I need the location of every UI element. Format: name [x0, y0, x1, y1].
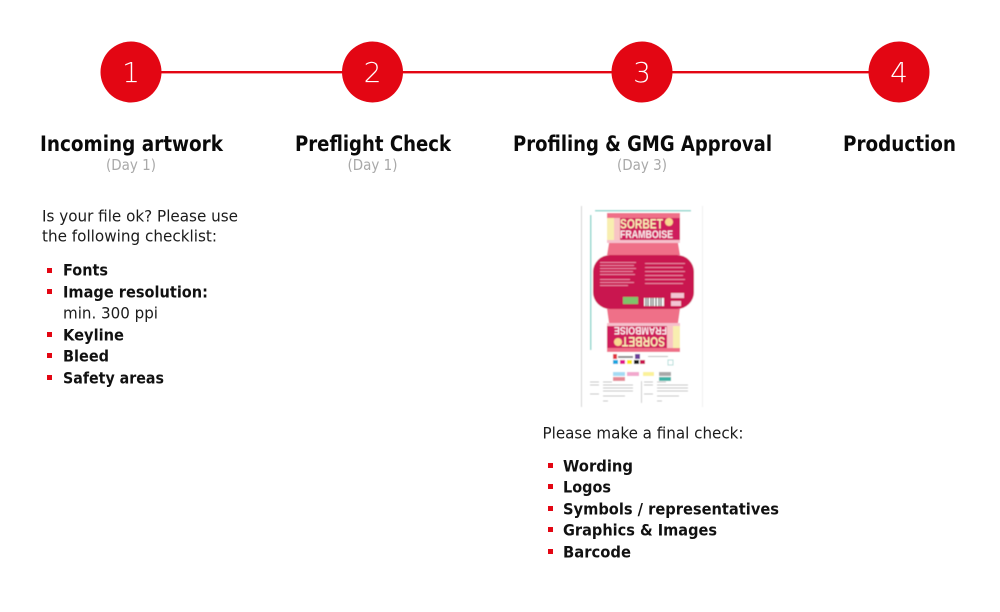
timeline connector line: [131, 71, 899, 73]
final checklist: Wording: [563, 456, 633, 476]
bottom lid panel, upside down: SORBET: [622, 334, 665, 350]
step 2 marker: 2: [364, 56, 381, 89]
step 1 marker: 1: [122, 56, 140, 89]
final checklist: Logos: [563, 478, 611, 496]
bottom lid panel, upside down: [607, 323, 680, 352]
date: day 1: (Day 1): [348, 156, 398, 174]
final check intro text: Please make a final check:: [542, 424, 744, 442]
checklist intro text: [42, 206, 238, 246]
artwork checklist: min. 300 ppi: [63, 304, 158, 322]
final checklist: Barcode: [563, 542, 631, 562]
central oval panel with back label: [593, 255, 694, 309]
top lid panel: SORBET: [620, 216, 663, 232]
artwork checklist: Bleed: [63, 346, 109, 366]
heading: production: Production: [843, 132, 956, 156]
date: day 3: (Day 3): [617, 156, 667, 174]
heading: preflight check: Preflight Check: [295, 132, 452, 156]
checklist intro text: Is your file ok? Please use: [42, 206, 238, 226]
upper light pink panel: [607, 243, 680, 255]
step 3 marker: 3: [633, 56, 651, 89]
step 2 marker: [342, 42, 403, 102]
checklist intro text: the following checklist:: [42, 226, 217, 246]
final checklist: [548, 456, 779, 562]
heading: profiling and GMG approval: Profiling & GMG Approval: [513, 132, 772, 156]
artwork checklist: Image resolution:: [63, 282, 208, 302]
final checklist: Graphics & Images: [563, 520, 717, 540]
step 4 marker: 4: [890, 56, 908, 89]
date: day 1: (Day 1): [106, 156, 156, 174]
final checklist: Symbols / representatives: [563, 500, 779, 518]
artwork checklist: Keyline: [63, 326, 124, 344]
artwork checklist: Fonts: [63, 260, 108, 280]
artwork checklist: [47, 260, 208, 388]
top lid panel: [607, 213, 680, 243]
bottom lid panel, upside down: FRAMBOISE: [614, 324, 667, 336]
step 3 marker: [612, 42, 672, 102]
packaging proof image: [581, 206, 703, 407]
colour bars and approval details: [590, 354, 688, 403]
step 1 marker: [100, 42, 162, 102]
heading: incoming artwork: Incoming artwork: [40, 132, 224, 156]
artwork checklist: Safety areas: [63, 368, 164, 388]
lower light pink panel: [607, 309, 680, 323]
step 4 marker: [868, 42, 930, 102]
top lid panel: FRAMBOISE: [620, 229, 673, 241]
